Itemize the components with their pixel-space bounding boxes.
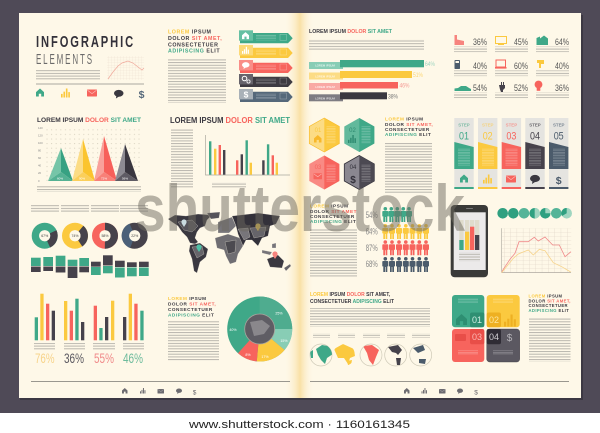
- triangle green: [48, 148, 73, 181]
- text block: [385, 142, 432, 194]
- value labels: 90%: [79, 176, 85, 180]
- heading: ADIPISCING ELIT: [528, 308, 569, 313]
- panel: quadrant: [452, 294, 571, 362]
- globe slate: [410, 344, 432, 366]
- ribbon green: [239, 30, 293, 43]
- triangle yellow: [72, 139, 95, 181]
- chart axes: [206, 135, 290, 175]
- tile dark: [487, 329, 520, 362]
- panel: grouped bars: [34, 294, 144, 366]
- tile dark: 04: [489, 332, 499, 342]
- text block: [310, 308, 430, 327]
- panel: title block: [36, 33, 145, 101]
- panel: people pictograms: [310, 204, 429, 278]
- y axis labels: 100: [38, 141, 43, 145]
- subtitle: ELEMENTS: [36, 52, 94, 68]
- tile dark: $: [507, 333, 513, 344]
- heading: CONSECTETUER: [168, 42, 218, 48]
- step 02: 02: [483, 130, 493, 142]
- row dark: [309, 92, 399, 101]
- stat plug: 52%: [514, 83, 528, 93]
- text block: [168, 321, 219, 361]
- stat factory: 36%: [473, 37, 487, 47]
- hexagon 04: $: [350, 175, 356, 186]
- heading: CONSECTETUER: [168, 307, 213, 312]
- row green: LOREM IPSUM: [315, 64, 335, 68]
- mini line chart: [107, 56, 144, 80]
- globe yellow: [334, 344, 355, 365]
- percentages: 87%: [366, 243, 378, 253]
- y axis labels: 40: [38, 164, 42, 168]
- value labels: 72%: [101, 176, 107, 180]
- panel: pie dots: [497, 208, 572, 219]
- heading: DOLOR SIT AMET,: [528, 298, 571, 303]
- diverging boxes: [31, 255, 149, 278]
- donut 22%: 22%: [131, 234, 138, 238]
- value labels: 56%: [122, 176, 128, 180]
- stat bulb: 36%: [555, 83, 569, 93]
- text block: [529, 318, 570, 362]
- panel: donuts: [31, 205, 149, 278]
- pie: 8%: [245, 353, 251, 357]
- heading: DOLOR SIT AMET,: [168, 302, 216, 306]
- heading: LOREM IPSUM DOLOR SIT AMET: [170, 116, 290, 125]
- tile red: 03: [472, 332, 482, 342]
- panel: steps: [454, 118, 568, 189]
- caption text: [212, 182, 246, 188]
- step 03: [502, 118, 521, 189]
- hexagon 04: 04: [350, 165, 357, 171]
- percentages: 55%: [94, 351, 114, 366]
- heading: CONSECTETUER: [528, 303, 568, 308]
- row green: 64%: [425, 62, 436, 68]
- heading: DOLOR SIT AMET,: [385, 122, 433, 127]
- stat laptop: 60%: [514, 61, 528, 71]
- globe green: [310, 344, 334, 366]
- y axis labels: 60: [38, 156, 42, 160]
- percentages: 68%: [366, 259, 378, 269]
- row slate: [382, 257, 429, 272]
- panel: ribbon list: [168, 30, 293, 103]
- y axis labels: 140: [38, 126, 43, 130]
- step 04: 04: [530, 130, 540, 142]
- globe red: [360, 344, 382, 366]
- stat car: 54%: [473, 83, 487, 93]
- footer strip: www.shutterstock.com · 1160161345: [188, 419, 410, 431]
- footer rule and icons right: [310, 381, 569, 396]
- intro text: [36, 70, 100, 80]
- heading: LOREM IPSUM DOLOR SIT AMET: [309, 29, 393, 35]
- step 04: STEP: [529, 122, 541, 128]
- footer rule and icons left: [31, 381, 290, 396]
- stat monitor: 45%: [514, 37, 528, 47]
- watermark: shutterstock: [135, 171, 465, 245]
- donut 58%: 58%: [101, 234, 109, 238]
- pie: 17%: [261, 355, 269, 359]
- row green: [382, 207, 412, 222]
- text block: [168, 59, 226, 103]
- percentages: 36%: [64, 351, 84, 366]
- red line: [502, 237, 571, 272]
- yellow line: [502, 249, 571, 273]
- bars: [209, 140, 278, 175]
- panel: phone: [451, 205, 488, 277]
- hexagon 04: [344, 156, 374, 190]
- row yellow: 51%: [413, 73, 424, 79]
- panel: bar chart: [170, 116, 290, 189]
- group 3: [94, 301, 114, 340]
- triangle dark: [115, 144, 138, 181]
- heading: LOREM IPSUM: [310, 204, 349, 208]
- heading: [528, 294, 571, 313]
- step 01: 01: [459, 130, 469, 142]
- ribbon yellow: [239, 45, 293, 58]
- hexagon 02: 02: [349, 128, 356, 134]
- row dark: LOREM IPSUM: [315, 96, 335, 100]
- heading: CONSECTETUER: [385, 127, 430, 132]
- panel: horizontal bars: [309, 29, 436, 101]
- heading: LOREM IPSUM: [168, 30, 211, 36]
- y axis labels: 0: [38, 179, 40, 183]
- hexagon 01: 01: [315, 128, 322, 134]
- row red: LOREM IPSUM: [315, 85, 335, 89]
- heading: [385, 116, 433, 137]
- pin red: [272, 251, 278, 259]
- heading: LOREM IPSUM: [168, 296, 207, 301]
- step 01: [454, 118, 474, 189]
- pin blue: [181, 219, 187, 227]
- ribbon red: [239, 60, 293, 73]
- panel: globes: [310, 292, 432, 366]
- value labels: 60%: [57, 176, 63, 180]
- heading: [310, 204, 357, 224]
- heading: DOLOR SIT AMET,: [168, 36, 222, 42]
- caption text: [37, 186, 141, 192]
- group 4: [123, 294, 144, 340]
- y axis labels: 80: [38, 148, 42, 152]
- percentages: [35, 351, 143, 366]
- stat building: 64%: [555, 37, 569, 47]
- panel: icon stats: [454, 35, 569, 98]
- heading: [168, 296, 216, 318]
- step 02: STEP: [482, 122, 494, 128]
- row yellow: [309, 71, 424, 80]
- heading: DOLOR SIT AMET: [310, 209, 357, 214]
- row green: [309, 60, 436, 69]
- y axis labels: 120: [38, 134, 43, 138]
- stat faucet: 40%: [555, 61, 569, 71]
- heading: [310, 292, 394, 305]
- row yellow: [382, 224, 429, 239]
- step 05: STEP: [553, 122, 565, 128]
- tile green: 01: [472, 315, 482, 325]
- captions: [313, 333, 430, 338]
- row red: [309, 82, 410, 90]
- donut 67%: 67%: [41, 234, 48, 238]
- percentages: 46%: [123, 351, 143, 366]
- group 2: [64, 299, 84, 340]
- heading: LOREM IPSUM DOLOR SIT AMET,: [310, 292, 391, 298]
- pin teal: [196, 244, 202, 252]
- ribbon slate: $: [244, 90, 249, 100]
- y axis labels: 20: [38, 171, 42, 175]
- heading: ADIPISCING ELIT: [310, 219, 356, 224]
- hexagon 03: 03: [315, 165, 322, 171]
- text columns: [31, 205, 148, 213]
- percentages: 54%: [366, 210, 378, 220]
- heading: CONSECTETUER: [310, 214, 355, 219]
- footer rule and icons left: $: [193, 390, 197, 396]
- heading: LOREM IPSUM: [385, 116, 424, 122]
- stat fuel: 40%: [473, 61, 487, 71]
- title: INFOGRAPHIC: [36, 33, 135, 50]
- side text: [171, 129, 193, 189]
- triangle red: [94, 136, 117, 181]
- row dark: 38%: [388, 94, 399, 100]
- step 03: 03: [506, 130, 516, 142]
- heading: LOREM IPSUM DOLOR SIT AMET: [37, 117, 141, 124]
- percentages: [366, 210, 378, 269]
- percentages: 76%: [35, 351, 54, 366]
- pie: 40%: [229, 328, 237, 332]
- step 03: STEP: [506, 122, 517, 128]
- panel: hexagons: [309, 116, 433, 194]
- y axis labels: [38, 126, 43, 183]
- heading: ADIPISCING ELIT: [385, 132, 431, 137]
- heading: CONSECTETUER ADIPISCING ELIT: [310, 299, 394, 305]
- ribbon dark: [239, 74, 293, 87]
- heading: LOREM IPSUM: [528, 294, 563, 298]
- text block: [309, 39, 424, 50]
- step 05: 05: [554, 130, 564, 142]
- row yellow: LOREM IPSUM: [315, 74, 335, 78]
- step 05: [549, 118, 568, 189]
- step 02: [478, 118, 497, 189]
- percentages: 64%: [366, 226, 378, 236]
- chart grid: [45, 127, 141, 181]
- heading: ADIPISCING ELIT: [168, 312, 214, 318]
- heading: ADIPISCING ELIT: [168, 49, 220, 55]
- continents: [168, 212, 291, 273]
- value labels: [57, 176, 128, 180]
- heading: [168, 30, 222, 55]
- step 05: $: [556, 175, 562, 187]
- row red: [382, 240, 429, 255]
- pie: 25%: [275, 312, 283, 316]
- panel: triangle chart: [37, 117, 141, 192]
- row red: 46%: [400, 84, 410, 90]
- group 1: [35, 294, 55, 340]
- footer strip: [0, 413, 600, 433]
- footer rule and icons right: $: [474, 390, 478, 396]
- panel: line chart: [502, 228, 571, 273]
- panel: pie chart: [168, 296, 292, 362]
- icon row: $: [139, 89, 145, 101]
- text block: [310, 229, 357, 278]
- pie: [227, 296, 292, 362]
- panel: world map: [168, 212, 291, 273]
- captions: [34, 343, 144, 351]
- pin yellow: [255, 223, 261, 231]
- globe dark: [385, 344, 407, 366]
- tile yellow: 02: [489, 315, 499, 325]
- pie: 15%: [280, 339, 288, 343]
- step 04: [525, 118, 545, 189]
- donut 74%: 74%: [71, 234, 79, 238]
- step 01: STEP: [458, 122, 470, 128]
